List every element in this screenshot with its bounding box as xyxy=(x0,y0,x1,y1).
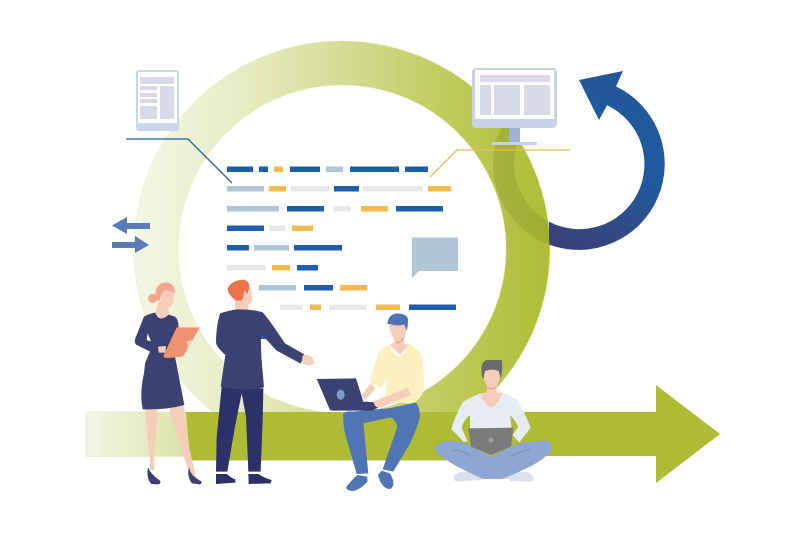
person: man in suit pointing xyxy=(216,280,314,484)
speech bubble xyxy=(412,238,458,278)
code-like text bars xyxy=(227,166,456,339)
person: man sitting cross-legged with laptop xyxy=(435,360,552,482)
person: man with laptop on arrow xyxy=(317,313,424,491)
monitor icon xyxy=(472,68,557,145)
exchange arrows xyxy=(112,217,150,253)
person: woman with tablet xyxy=(135,282,202,484)
curved blue return arrow xyxy=(493,71,665,250)
tablet icon xyxy=(136,70,179,131)
green cycle ring xyxy=(134,41,550,457)
green progress arrow xyxy=(86,385,720,483)
orange connector line xyxy=(430,150,570,177)
blue connector line xyxy=(126,139,232,183)
